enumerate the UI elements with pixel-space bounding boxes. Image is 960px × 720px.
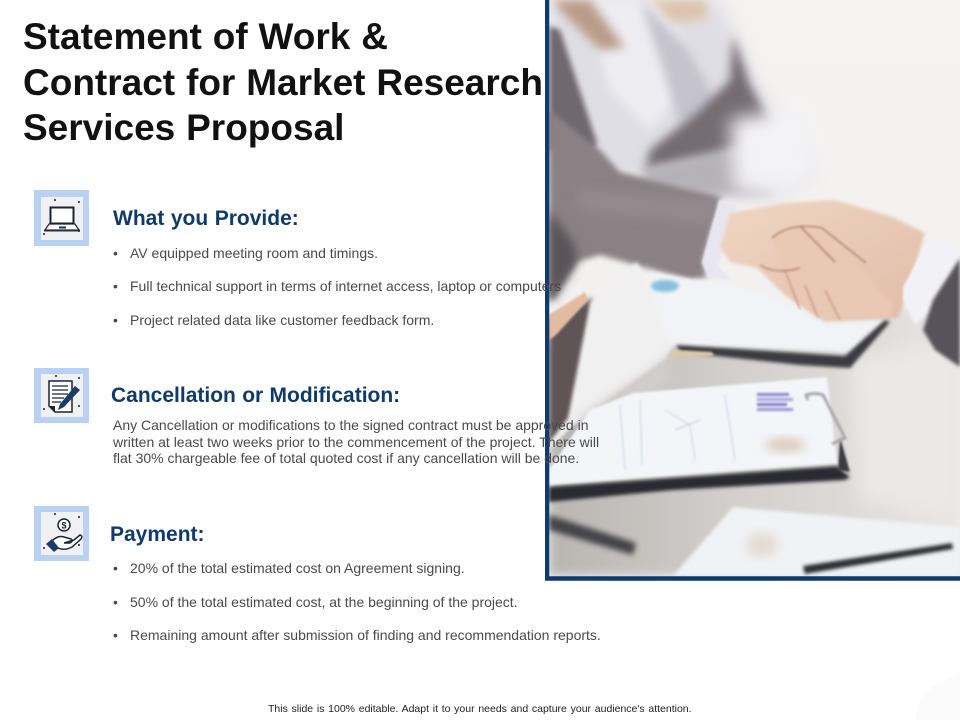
text: • [113, 312, 118, 328]
mini bar chart on document [757, 393, 793, 411]
photo frame [547, 0, 960, 578]
table [549, 300, 960, 576]
heading: what you provide: What you Provide: [113, 207, 299, 230]
paragraph: cancellation terms: Any Cancellation or modifications to the signed contract must be approved in [113, 417, 588, 433]
bullet list: payment: 20% of the total estimated cost on Agreement signing. [130, 560, 465, 576]
decorative corner swirl [910, 670, 960, 720]
handshake [702, 200, 960, 367]
text: • [113, 594, 118, 610]
paragraph: cancellation terms [113, 417, 599, 466]
bullet list: payment: 50% of the total estimated cost, at the beginning of the project. [130, 594, 518, 610]
bullet list: what you provide: Full technical support in terms of internet access, laptop or computers [130, 278, 561, 294]
icon: laptop [34, 190, 89, 246]
icon: document and pen [34, 368, 89, 423]
bullet list: payment: Remaining amount after submission of finding and recommendation reports. [130, 627, 601, 643]
title [23, 16, 543, 148]
heading: payment: Payment: [110, 523, 205, 546]
bullet list: payment [113, 560, 601, 643]
woman in grey jacket [549, 0, 820, 300]
title: Services Proposal [23, 107, 344, 148]
text: • [113, 278, 118, 294]
bullet list: what you provide: AV equipped meeting room and timings. [130, 245, 378, 261]
footer note: This slide is 100% editable. Adapt it to your needs and capture your audience's attention. [268, 703, 692, 715]
heading: cancellation or modification: Cancellation or Modification: [111, 384, 400, 407]
bullet list: what you provide: Project related data like customer feedback form. [130, 312, 434, 328]
background folder and papers [650, 272, 890, 368]
tablet held by colleague [549, 262, 672, 450]
photo: business handshake over documents [545, 0, 960, 581]
paragraph: cancellation terms: written at least two weeks prior to the commencement of the project. There will [113, 434, 599, 450]
paragraph: cancellation terms: flat 30% chargeable fee of total quoted cost if any cancellation will be done. [113, 450, 579, 466]
pen left [549, 515, 636, 555]
bullet list: what you provide [113, 245, 561, 328]
icon: hand holding coin: $ [61, 520, 67, 530]
clipboard with chart document [549, 377, 850, 502]
title: Contract for Market Research [23, 62, 543, 102]
text: • [113, 245, 118, 261]
title: Statement of Work & [23, 16, 388, 57]
icon: hand holding coin [34, 506, 89, 561]
foreground paper and pen [673, 507, 960, 576]
text: • [113, 627, 118, 643]
text: • [113, 560, 118, 576]
